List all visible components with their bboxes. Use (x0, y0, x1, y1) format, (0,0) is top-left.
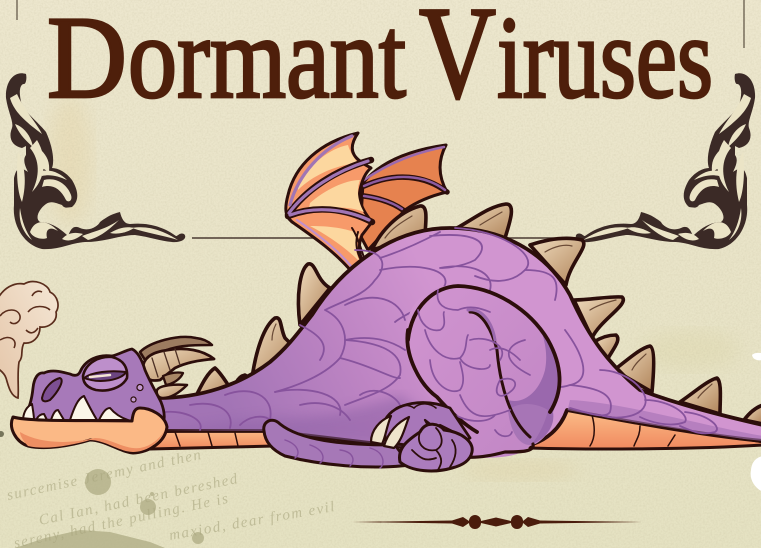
handwriting and ink stains: surcemise Jeremy and then (6, 447, 204, 504)
neck belly (150, 428, 275, 449)
handwriting and ink stains: maxiod, dear from evil (168, 499, 337, 544)
tail belly (530, 408, 761, 449)
title (47, 0, 713, 126)
divider line behind dragon (192, 237, 578, 239)
scales (165, 228, 717, 433)
spine ribs (272, 212, 712, 398)
lower jaw (11, 408, 167, 453)
back wing (360, 145, 447, 250)
nostril (42, 378, 62, 401)
flourish: left (6, 73, 185, 249)
cloud curls (0, 291, 50, 348)
handwriting and ink stains: Cal Ian, had been bereshed (38, 471, 240, 529)
upper teeth (23, 396, 128, 420)
head (11, 337, 214, 453)
skull (24, 349, 164, 430)
skin marks (131, 384, 143, 402)
eye (83, 357, 127, 390)
arm (264, 420, 410, 467)
dragon (11, 133, 761, 471)
arm scales (285, 440, 383, 468)
haunch (406, 285, 560, 458)
body shading (160, 395, 761, 450)
top frame lines (17, 0, 744, 48)
handwriting and ink stains (6, 447, 337, 548)
paws and claws (371, 403, 472, 471)
body (158, 228, 761, 455)
smoke cloud (0, 282, 58, 398)
horns (140, 337, 212, 360)
bottom ornament (352, 515, 642, 529)
spines (196, 204, 761, 424)
front wing (286, 133, 372, 272)
flourish: right (576, 73, 755, 249)
